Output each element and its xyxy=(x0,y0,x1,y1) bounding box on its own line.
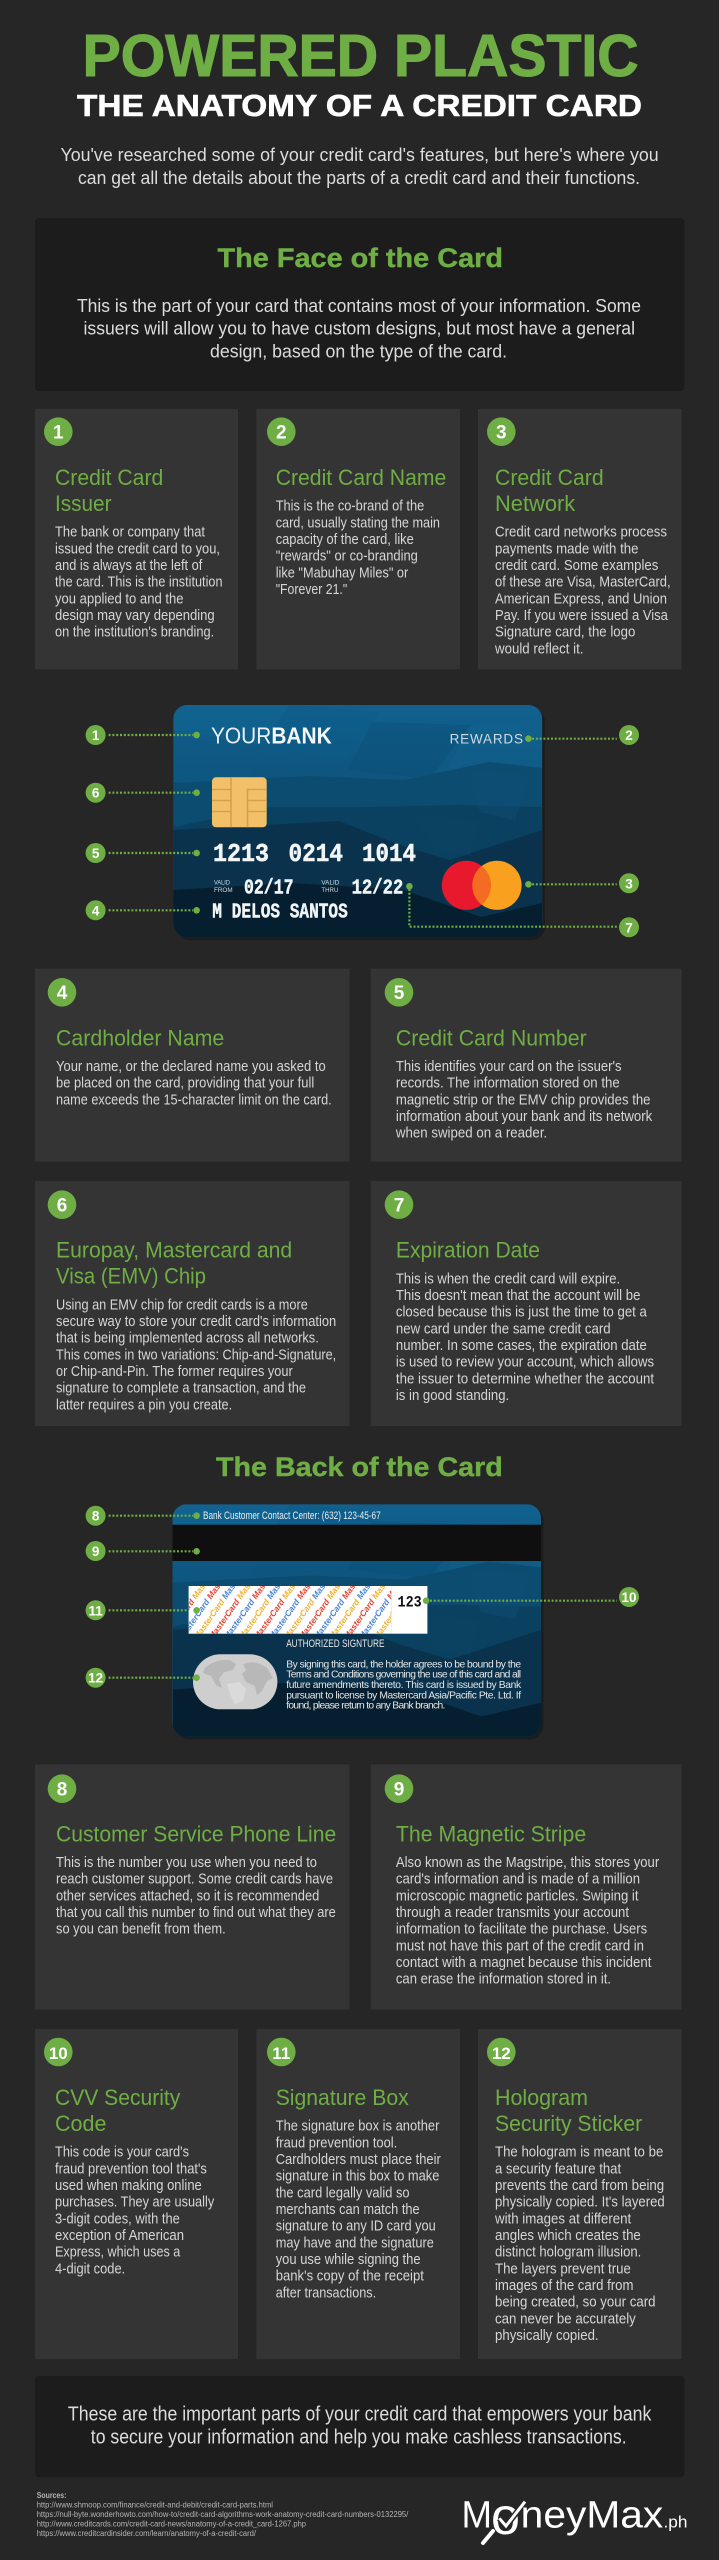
callout 6: chip: 6 xyxy=(92,786,100,801)
contact center text: Bank Customer Contact Center: (632) 123-45-67 xyxy=(203,1510,381,1522)
callout 10: CVV: 10 xyxy=(621,1590,637,1605)
body text xyxy=(494,2145,665,2344)
body text: the issuer to determine whether the account xyxy=(396,1371,654,1387)
body text: signature to any ID card you xyxy=(276,2219,436,2235)
panel: 3 credit card network xyxy=(478,409,682,669)
body text: records. The information stored on the xyxy=(396,1076,620,1092)
heading: Cardholder Name xyxy=(56,1026,224,1051)
body text: Pay. If you were issued a Visa xyxy=(495,608,669,624)
body text xyxy=(396,1271,654,1404)
heading xyxy=(55,465,163,516)
badge 8 xyxy=(48,1774,76,1803)
sources: http://www.creditcards.com/credit-card-news/anatomy-of-a-credit_card-1267.php xyxy=(37,2520,307,2529)
logo: MoneyMax.ph: neyMax xyxy=(521,2494,663,2536)
body text: the card legally valid so xyxy=(276,2185,410,2201)
body text: "Forever 21." xyxy=(276,582,347,598)
mastercard logo xyxy=(442,861,522,910)
body text: secure way to store your credit card's information xyxy=(56,1314,336,1330)
body text: name exceeds the 15-character limit on the card. xyxy=(56,1092,332,1108)
body text: a security feature that xyxy=(495,2161,621,2177)
text block: face description: design, based on the type of the card. xyxy=(210,340,507,362)
badge 12 xyxy=(487,2038,516,2066)
body text: information about your bank and its network xyxy=(396,1109,653,1125)
body text: that you call this number to find out what they are xyxy=(56,1905,336,1921)
badge 9: 9 xyxy=(394,1780,404,1800)
text block: face description: This is the part of your card that contains most of your information. Some xyxy=(77,295,641,316)
body text: The hologram is meant to be xyxy=(495,2145,663,2161)
heading: the face of the card: The Face of the Card xyxy=(218,243,503,273)
heading xyxy=(55,2085,180,2136)
callout 12: hologram: 12 xyxy=(88,1671,103,1686)
signature box: MasterCard MasterCard MasterCard xyxy=(341,1516,433,1641)
panel: 5 credit card number xyxy=(371,969,682,1162)
card number: 0214 xyxy=(288,839,343,869)
sources: https://www.creditcardinsider.com/learn/anatomy-of-a-credit-card/ xyxy=(37,2529,257,2538)
panel: 9 the magnetic stripe xyxy=(371,1764,682,2010)
body text: Signature card, the logo xyxy=(495,625,635,641)
badge 8: 8 xyxy=(57,1780,67,1800)
heading: Credit Card xyxy=(55,465,163,490)
body text: credit card. Some examples xyxy=(495,558,658,574)
body text: signature in this box to make xyxy=(276,2169,439,2185)
body text: Using an EMV chip for credit cards is a more xyxy=(56,1297,308,1313)
cardholder name: M DELOS SANTOS xyxy=(212,901,348,925)
body text: physically copied. It's layered xyxy=(495,2195,665,2211)
body text: payments made with the xyxy=(495,541,638,557)
panel: the face of the card intro xyxy=(35,218,684,391)
valid thru: 12/22 xyxy=(352,876,403,900)
body text: "rewards" or co-branding xyxy=(276,549,418,565)
heading: Credit Card Number xyxy=(396,1026,587,1051)
badge 3 xyxy=(487,417,516,446)
callout 3: network logo xyxy=(525,873,639,893)
badge 10: 10 xyxy=(49,2044,68,2063)
body text: images of the card from xyxy=(495,2278,634,2294)
callout 11: signature box xyxy=(86,1600,200,1620)
signature box: MasterCard MasterCard MasterCard xyxy=(161,1516,253,1641)
callout 4: cardholder name: 4 xyxy=(92,903,100,918)
body text: Your name, or the declared name you asked to xyxy=(56,1059,326,1075)
body text: 4-digit code. xyxy=(55,2261,125,2277)
signature box: MasterCard MasterCard MasterCard xyxy=(296,1516,388,1641)
body text xyxy=(56,1855,336,1938)
body text: so you can benefit from them. xyxy=(56,1922,226,1938)
panel: 4 cardholder name xyxy=(35,969,350,1162)
heading: Network xyxy=(495,491,576,516)
heading xyxy=(495,465,604,516)
valid from: 02/17 xyxy=(244,876,294,900)
badge 1: 1 xyxy=(53,422,64,444)
heading xyxy=(56,1238,292,1289)
badge 12: 12 xyxy=(492,2044,511,2063)
heading: Expiration Date xyxy=(396,1238,540,1263)
terms text xyxy=(286,1659,522,1712)
body text: American Express, and Union xyxy=(495,591,667,607)
valid from: FROM xyxy=(214,888,233,894)
callout 5: card number: 5 xyxy=(92,846,100,861)
callout 2: rewards xyxy=(525,725,639,745)
panel: 10 CVV security code xyxy=(35,2029,238,2359)
badge 2 xyxy=(267,417,296,446)
panel: 12 hologram security sticker xyxy=(478,2029,682,2359)
logo: MoneyMax.ph xyxy=(462,2488,688,2546)
credit card back illustration xyxy=(161,1504,544,1740)
body text: of these are Visa, MasterCard, xyxy=(495,575,671,591)
body text xyxy=(276,2119,441,2301)
magnetic stripe xyxy=(172,1525,541,1561)
body text: would reflect it. xyxy=(494,641,584,657)
callout 4: cardholder name xyxy=(86,900,200,920)
body text: card, usually stating the main xyxy=(276,515,440,531)
signature box: MasterCard MasterCard MasterCard xyxy=(281,1516,373,1641)
body text: capacity of the card, like xyxy=(276,532,414,548)
panel: closing message: These are the important parts of your credit card that empowers your bank xyxy=(68,2404,652,2426)
body text: This is the co-brand of the xyxy=(276,499,424,515)
terms text: pursuant to license by Mastercard Asia/Pacific Pte. Ltd. If xyxy=(286,1690,521,1701)
heading: Credit Card xyxy=(495,465,604,490)
heading: Visa (EMV) Chip xyxy=(56,1264,206,1289)
body text: other services attached, so it is recommended xyxy=(56,1888,319,1904)
intro text: can get all the details about the parts of a credit card and their functions. xyxy=(78,167,640,188)
sources xyxy=(37,2491,409,2538)
badge 6: 6 xyxy=(57,1196,67,1216)
badge 10 xyxy=(44,2038,73,2066)
badge 3: 3 xyxy=(496,422,507,444)
callout 9: magnetic stripe: 9 xyxy=(92,1544,99,1559)
panel: 11 signature box xyxy=(256,2029,460,2359)
valid thru: THRU xyxy=(321,888,338,894)
signature box: MasterCard MasterCard MasterCard xyxy=(191,1516,283,1641)
intro text: You've researched some of your credit card's features, but here's where you xyxy=(60,144,659,165)
body text: is in good standing. xyxy=(396,1388,509,1404)
body text: bank's copy of the receipt xyxy=(276,2269,424,2285)
body text: purchases. They are usually xyxy=(55,2195,215,2211)
body text: microscopic magnetic particles. Swiping it xyxy=(396,1888,638,1904)
signature box: MasterCard MasterCard MasterCard xyxy=(356,1516,448,1641)
callout 1: bank name: 1 xyxy=(92,728,100,743)
valid thru xyxy=(321,876,403,900)
rewards label: REWARDS xyxy=(450,731,523,746)
body text: Also known as the Magstripe, this stores your xyxy=(396,1855,659,1871)
terms text: Terms and Conditions governing the use of this card and all xyxy=(286,1670,521,1681)
signature box: MasterCard MasterCard MasterCard xyxy=(206,1516,298,1641)
callout 3: network logo: 3 xyxy=(625,876,633,891)
badge 7 xyxy=(385,1190,413,1219)
body text: card's information and is made of a million xyxy=(396,1872,640,1888)
hologram sticker xyxy=(193,1654,277,1709)
body text: physically copied. xyxy=(495,2328,599,2344)
heading: Issuer xyxy=(55,491,112,516)
badge 4 xyxy=(48,978,76,1007)
sources: http://www.shmoop.com/finance/credit-and-debit/credit-card-parts.html xyxy=(37,2501,273,2510)
callout 10: CVV xyxy=(423,1587,639,1607)
card number: 1213 xyxy=(213,839,269,869)
body text: The signature box is another xyxy=(276,2119,440,2135)
body text: after transactions. xyxy=(276,2285,376,2301)
body text xyxy=(56,1059,332,1108)
body text: with images at different xyxy=(494,2211,631,2227)
panel: closing message: to secure your information and help you make cashless transactions. xyxy=(91,2426,627,2448)
body text: issued the credit card to you, xyxy=(55,541,220,557)
body text: This doesn't mean that the account will be xyxy=(396,1288,640,1304)
body text: fraud prevention tool. xyxy=(276,2135,397,2151)
body text xyxy=(396,1855,659,1988)
callout 9: magnetic stripe xyxy=(86,1541,200,1561)
body text: The layers prevent true xyxy=(495,2261,631,2277)
terms text: found, please return to any Bank branch. xyxy=(286,1701,445,1712)
heading: CVV Security xyxy=(55,2085,180,2110)
card number: 1014 xyxy=(362,839,416,869)
credit card front illustration xyxy=(173,705,545,940)
CVV box: 123 xyxy=(398,1594,422,1612)
badge 1 xyxy=(44,417,73,446)
body text: This is when the credit card will expire. xyxy=(396,1271,620,1287)
body text: Express, which uses a xyxy=(55,2245,181,2261)
body text: must not have this part of the credit card in xyxy=(396,1938,644,1954)
signature box: MasterCard MasterCard MasterCard xyxy=(371,1516,463,1641)
sources: https://null-byte.wonderhowto.com/how-to/credit-card-algorithms-work-anatomy-credit-card-numbers-0132295/ xyxy=(37,2510,409,2519)
signature box: MasterCard MasterCard MasterCard xyxy=(221,1516,313,1641)
body text: may have and the signature xyxy=(276,2235,434,2251)
body text xyxy=(395,1059,653,1142)
logo: MoneyMax.ph: M xyxy=(462,2494,492,2536)
valid from: VALID xyxy=(214,881,231,887)
badge 11 xyxy=(267,2038,296,2066)
body text: This identifies your card on the issuer's xyxy=(396,1059,622,1075)
panel: 2 credit card name xyxy=(256,409,460,669)
body text: The bank or company that xyxy=(55,525,205,541)
body text: 3-digit codes, with the xyxy=(55,2211,180,2227)
panel: closing message xyxy=(35,2376,684,2477)
heading: Hologram xyxy=(495,2085,588,2110)
text block: face description: issuers will allow you to have custom designs, but most have a general xyxy=(84,318,635,338)
signature caption: AUTHORIZED SIGNTURE xyxy=(286,1638,384,1650)
callout 8: contact number xyxy=(86,1506,200,1526)
body text: is used to review your account, which allows xyxy=(396,1355,654,1371)
heading: The Magnetic Stripe xyxy=(396,1822,586,1847)
body text: design may vary depending xyxy=(55,608,215,624)
body text: like "Mabuhay Miles" or xyxy=(276,565,408,581)
body text: and is always at the left of xyxy=(55,558,203,574)
body text: or Chip-and-Pin. The former requires your xyxy=(56,1364,293,1380)
body text: magnetic strip or the EMV chip provides the xyxy=(396,1092,650,1108)
callout 1: bank name xyxy=(86,725,200,745)
body text: you use while signing the xyxy=(276,2252,421,2268)
signature box: MasterCard MasterCard MasterCard xyxy=(266,1516,358,1641)
panel: 7 expiration date xyxy=(371,1181,682,1426)
callout 12: hologram xyxy=(86,1668,200,1688)
body text: This is the number you use when you need to xyxy=(56,1855,317,1871)
subtitle: THE ANATOMY OF A CREDIT CARD xyxy=(77,88,642,123)
body text: when swiped on a reader. xyxy=(395,1126,547,1142)
valid thru: VALID xyxy=(321,881,340,887)
card number xyxy=(213,839,416,869)
badge 6 xyxy=(48,1190,76,1219)
callout 6: chip xyxy=(86,783,200,803)
signature box: MasterCard MasterCard MasterCard xyxy=(311,1516,403,1641)
body text: angles which creates the xyxy=(495,2228,641,2244)
heading xyxy=(495,2085,642,2136)
signature box xyxy=(188,1586,392,1634)
callout 2: rewards: 2 xyxy=(625,728,633,743)
title: POWERED PLASTIC xyxy=(83,23,639,89)
bank name: YOURBANK xyxy=(211,722,332,748)
body text: Cardholders must place their xyxy=(276,2152,441,2168)
valid from xyxy=(214,876,294,900)
heading: the back of the card: The Back of the Card xyxy=(216,1452,503,1482)
logo: MoneyMax.ph: .ph xyxy=(664,2512,688,2531)
body text xyxy=(55,2145,215,2277)
body text: reach customer support. Some credit cards have xyxy=(56,1872,333,1888)
body text: signature to complete a transaction, and the xyxy=(56,1381,306,1397)
callout 7: expiration date xyxy=(406,883,639,937)
body text: merchants can match the xyxy=(276,2202,420,2218)
signature box: MasterCard MasterCard MasterCard xyxy=(251,1516,343,1641)
text block: face description xyxy=(77,295,641,362)
body text xyxy=(494,525,671,657)
heading: Europay, Mastercard and xyxy=(56,1238,292,1263)
badge 5 xyxy=(385,978,413,1007)
body text: information to facilitate the purchase. Users xyxy=(396,1922,647,1938)
panel: 1 credit card issuer xyxy=(35,409,238,669)
body text: the card. This is the institution xyxy=(55,575,222,591)
body text: on the institution's branding. xyxy=(55,625,214,641)
callout 8: contact number: 8 xyxy=(92,1509,100,1524)
signature box: MasterCard MasterCard MasterCard xyxy=(176,1516,268,1641)
callout 7: expiration date: 7 xyxy=(625,920,633,935)
badge 9 xyxy=(385,1774,413,1803)
body text: that is being implemented across all networks. xyxy=(56,1331,319,1347)
body text: closed because this is just the time to get a xyxy=(396,1305,648,1321)
badge 5: 5 xyxy=(394,983,405,1004)
badge 11: 11 xyxy=(272,2044,290,2063)
badge 7: 7 xyxy=(394,1196,404,1216)
body text: contact with a magnet because this incident xyxy=(396,1955,651,1971)
body text xyxy=(276,499,440,598)
body text: new card under the same credit card xyxy=(396,1321,611,1337)
CVV box xyxy=(391,1586,427,1634)
heading: Customer Service Phone Line xyxy=(56,1822,336,1847)
panel: 8 customer service phone line xyxy=(35,1764,350,2010)
heading: Credit Card Name xyxy=(276,465,446,490)
terms text: future amendments thereto. This card is issued by Bank xyxy=(286,1680,522,1691)
body text: exception of American xyxy=(55,2228,184,2244)
badge 2: 2 xyxy=(276,422,287,444)
intro text xyxy=(60,144,659,188)
body text: used when making online xyxy=(55,2178,202,2194)
heading: Code xyxy=(55,2111,106,2136)
body text: being created, so your card xyxy=(495,2295,656,2311)
body text xyxy=(56,1297,336,1413)
body text: prevents the card from being xyxy=(495,2178,664,2194)
EMV chip xyxy=(212,777,267,827)
heading: Security Sticker xyxy=(495,2111,642,2136)
body text: can erase the information stored in it. xyxy=(396,1972,611,1988)
badge 4: 4 xyxy=(57,983,68,1004)
body text: This code is your card's xyxy=(55,2145,189,2161)
callout 5: card number xyxy=(86,843,200,863)
body text: can never be accurately xyxy=(495,2311,636,2327)
sources: Sources: xyxy=(37,2491,66,2500)
signature box: MasterCard MasterCard MasterCard xyxy=(326,1516,418,1641)
panel: 6 EMV chip xyxy=(35,1181,350,1426)
body text: distinct hologram illusion. xyxy=(495,2245,641,2261)
body text: fraud prevention tool that's xyxy=(55,2161,207,2177)
body text: latter requires a pin you create. xyxy=(56,1397,232,1413)
terms text: By signing this card, the holder agrees to be bound by the xyxy=(286,1659,521,1670)
logo: MoneyMax.ph: o xyxy=(491,2488,520,2546)
body text: Credit card networks process xyxy=(495,525,667,541)
signature box: MasterCard MasterCard MasterCard xyxy=(236,1516,328,1641)
body text: number. In some cases, the expiration date xyxy=(396,1338,647,1354)
body text: This comes in two variations: Chip-and-Signature, xyxy=(56,1347,336,1363)
body text: be placed on the card, providing that your full xyxy=(56,1076,314,1092)
body text xyxy=(55,525,222,641)
body text: through a reader transmits your account xyxy=(396,1905,629,1921)
body text: you applied to and the xyxy=(55,591,184,607)
heading: Signature Box xyxy=(276,2085,409,2110)
callout 11: signature box: 11 xyxy=(88,1603,103,1618)
